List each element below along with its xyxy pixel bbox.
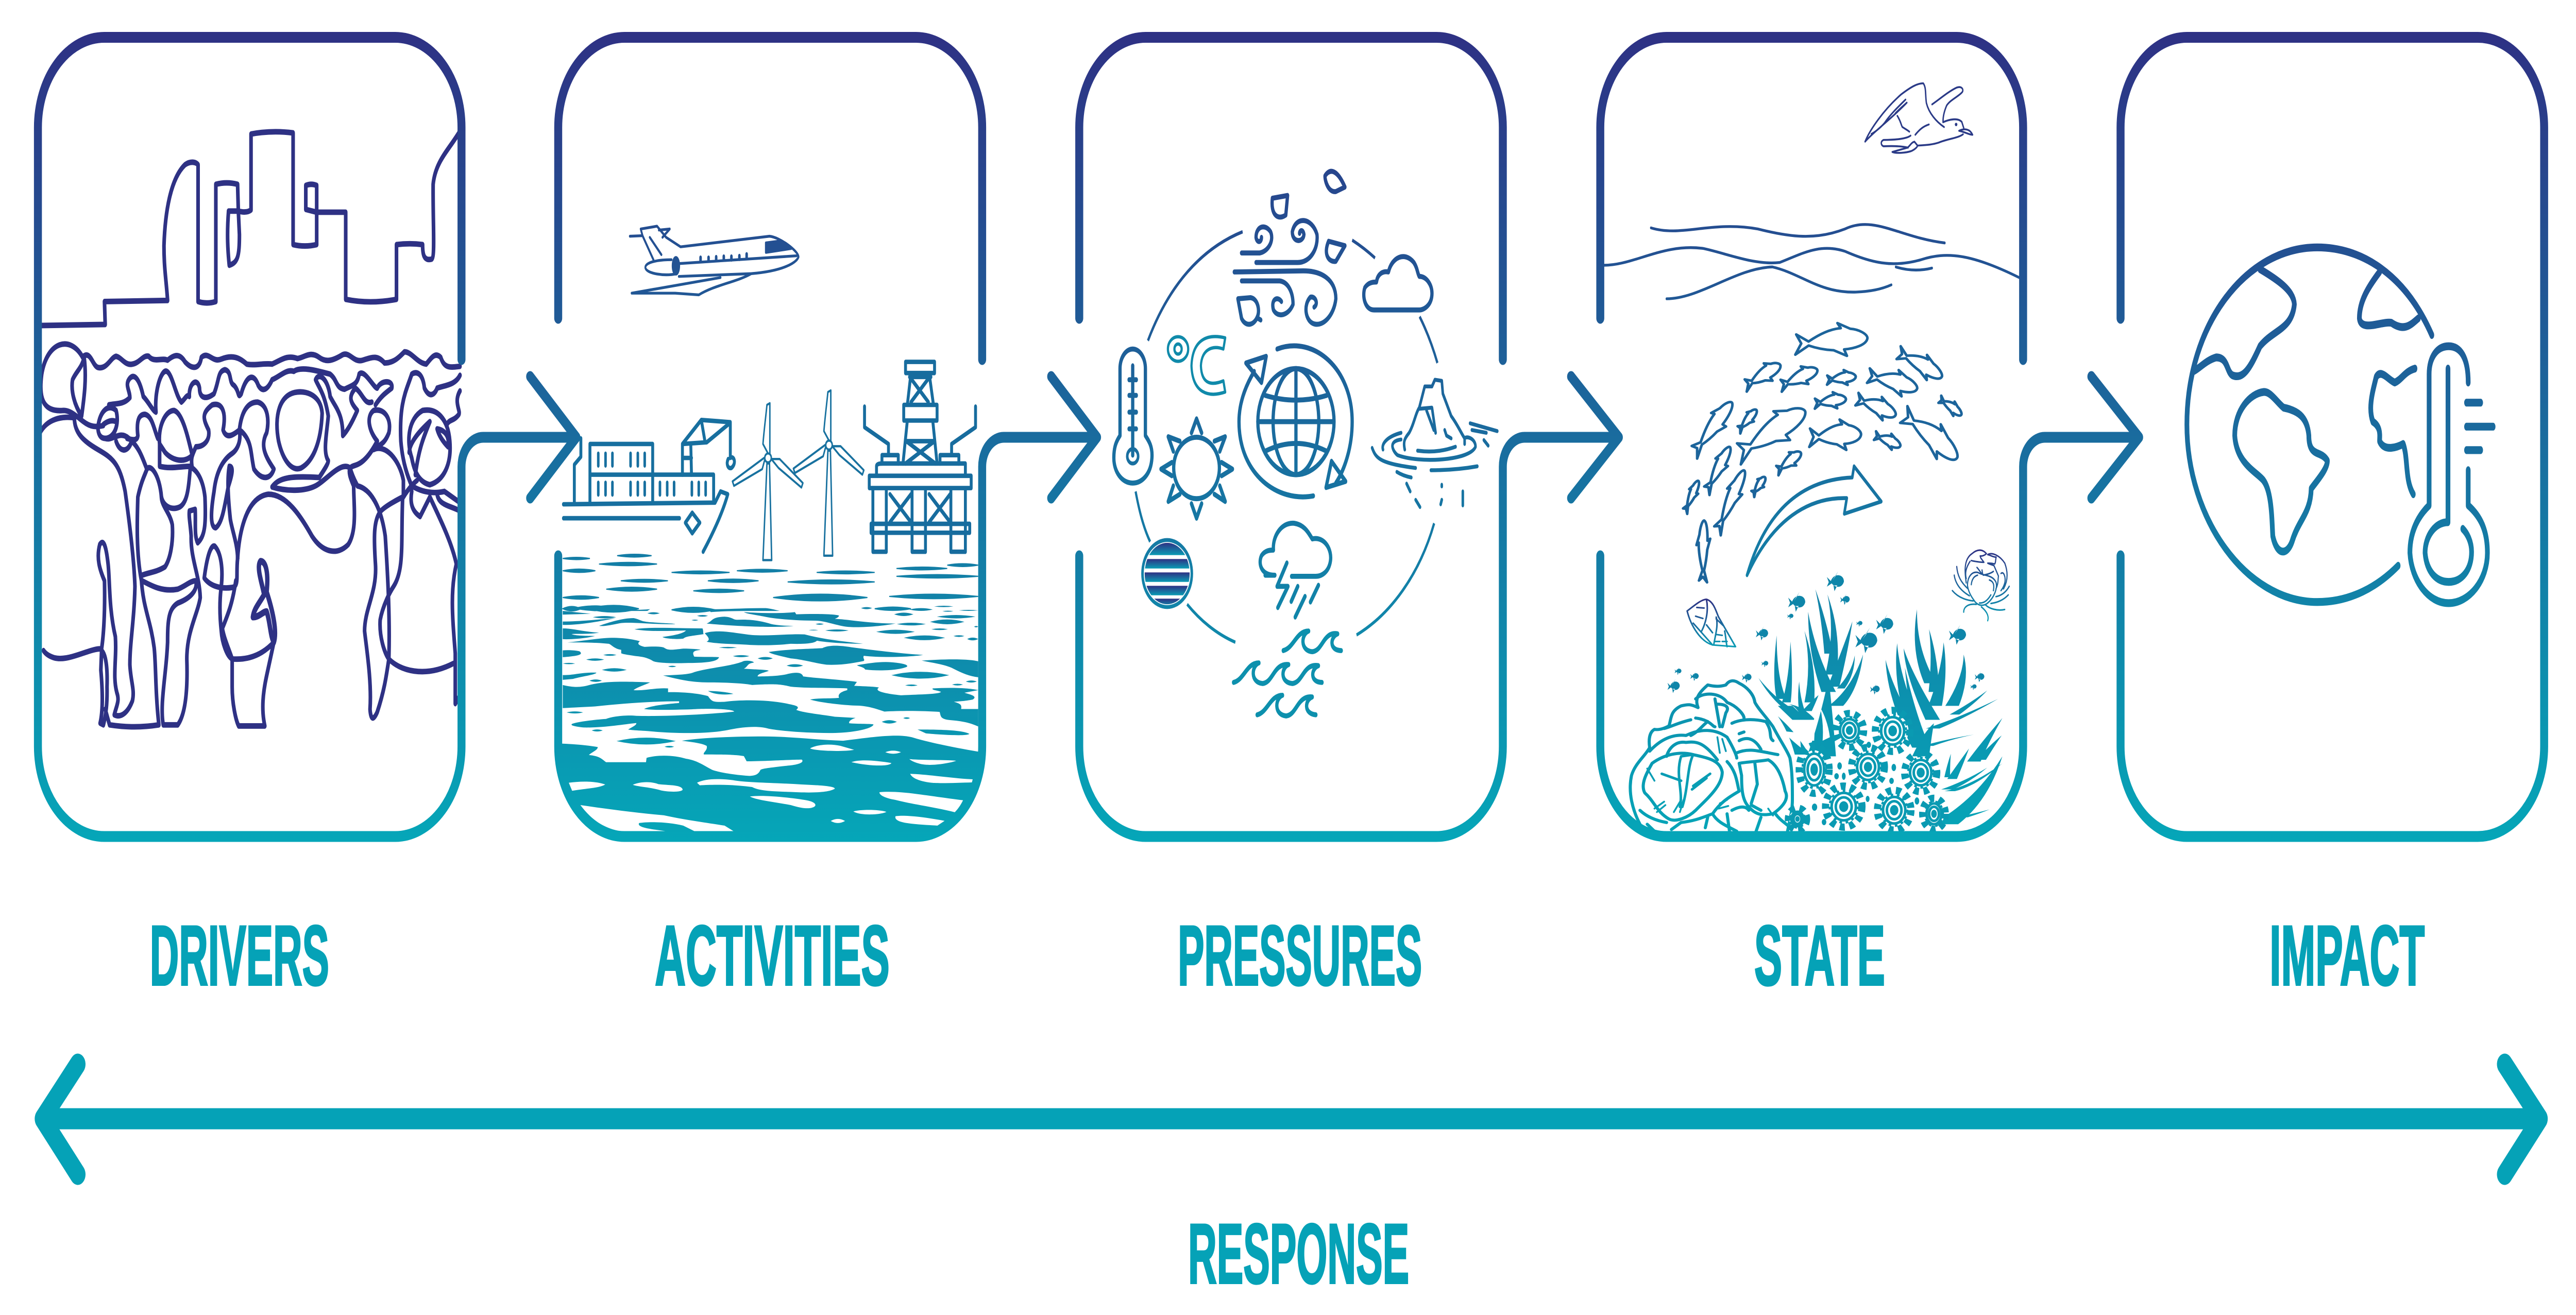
- heading: impact: IMPACT: [2269, 908, 2425, 1003]
- heading: drivers: DRIVERS: [150, 908, 329, 1003]
- icon: storm cloud: [1260, 523, 1331, 617]
- icon: cloud: [1364, 257, 1432, 310]
- icon: melting iceberg: [1372, 380, 1497, 507]
- icon: sea shell: [1687, 600, 1736, 646]
- activities icons: [564, 226, 976, 560]
- heading: pressures: PRESSURES: [1178, 908, 1422, 1003]
- heading: response: RESPONSE: [1188, 1206, 1409, 1301]
- panel: activities: [558, 37, 1097, 836]
- pressures illustration: climate icons in a ring: [1114, 172, 1497, 716]
- icon: globe with thermometer: [2187, 247, 2493, 603]
- icon: offshore oil rig: [865, 362, 976, 552]
- frame: state box and arrow to impact: [1600, 37, 2139, 836]
- crowd of people: [40, 344, 460, 727]
- icon: waves: [1233, 631, 1341, 716]
- icon: globe with rotating arrows: [1239, 346, 1352, 497]
- heading: activities: ACTIVITIES: [655, 908, 890, 1003]
- school of fish: [1681, 321, 1963, 583]
- frame: drivers box and arrow to activities: [38, 37, 577, 836]
- distant ripples: [563, 554, 978, 612]
- drivers illustration: skyline and crowd: [39, 132, 460, 727]
- icon: wind turbines: [733, 390, 864, 560]
- polyp coral: [1788, 710, 1945, 830]
- double-headed response arrow: [42, 1064, 2540, 1174]
- globe and continents: [2187, 247, 2432, 602]
- frame: pressures box and arrow to state: [1079, 37, 1619, 836]
- curved arrow: [1747, 466, 1882, 575]
- cabbage coral: [1630, 681, 1792, 831]
- foreground waves: [558, 605, 982, 836]
- icon: crab: [1952, 550, 2009, 621]
- thermometer: [2410, 346, 2493, 603]
- seaweed: [1758, 589, 2003, 824]
- small reef fish: [1668, 571, 1985, 694]
- icon: degrees celsius: [1168, 336, 1225, 394]
- icon: sun: [1161, 419, 1232, 518]
- icon: wind and leaves: [1234, 172, 1345, 325]
- heading: state: STATE: [1754, 908, 1885, 1003]
- panel: state: [1600, 37, 2139, 836]
- reef: shell, seaweed and cabbage coral: [1630, 589, 2003, 831]
- city skyline: [39, 132, 459, 326]
- frame: activities box and arrow to pressures: [558, 37, 1097, 836]
- sea surface lines: [1604, 225, 2019, 299]
- panel: pressures: [1079, 37, 1619, 836]
- panel: drivers: [38, 37, 577, 836]
- icon: jet aircraft: [630, 226, 799, 295]
- sea with waves: [558, 554, 982, 836]
- icon: thermometer: [1114, 349, 1152, 483]
- frame: impact box: [2121, 37, 2544, 836]
- dashed ring: [1136, 232, 1437, 642]
- icon: container ship: [564, 420, 735, 552]
- icon: striped circle: [1143, 540, 1192, 608]
- icon: seagull: [1865, 83, 1973, 153]
- panel: impact: [2121, 37, 2544, 836]
- state illustration: sea and school of fish: [1604, 225, 2019, 583]
